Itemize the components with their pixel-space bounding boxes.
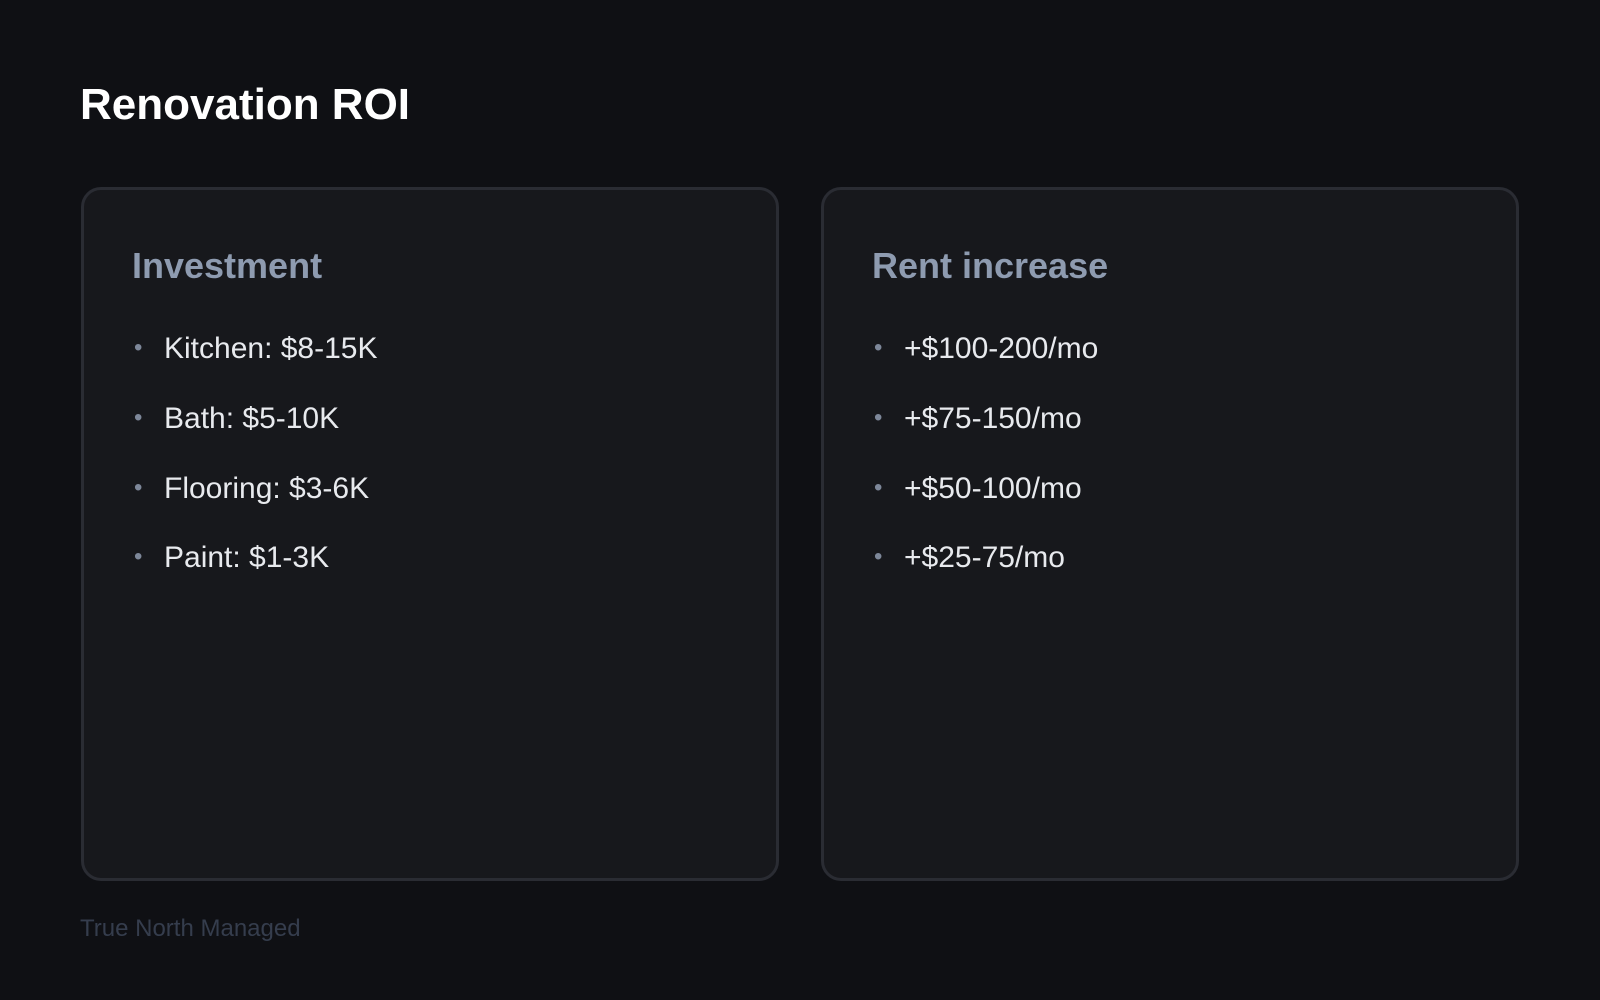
list: rent items: • (874, 404, 882, 431)
list: investment items: Flooring: $3-6K (164, 472, 369, 505)
list: rent items: • (874, 334, 882, 361)
list: investment items: Paint: $1-3K (164, 541, 329, 574)
heading: rent increase: Rent increase (872, 245, 1108, 286)
list: rent items: • (874, 474, 882, 501)
title: Renovation ROI (80, 80, 410, 129)
list: investment items: Kitchen: $8-15K (164, 332, 377, 365)
footer: True North Managed (80, 915, 301, 942)
list: rent items (874, 332, 1098, 574)
list: investment items: • (134, 404, 142, 431)
list: rent items: +$25-75/mo (904, 541, 1065, 574)
list: investment items: • (134, 334, 142, 361)
panel: investment (81, 187, 779, 881)
list: rent items: +$75-150/mo (904, 402, 1082, 435)
list: investment items (134, 332, 378, 574)
list: investment items: Bath: $5-10K (164, 402, 339, 435)
list: rent items: +$50-100/mo (904, 472, 1082, 505)
panel: rent increase (821, 187, 1519, 881)
list: investment items: • (134, 543, 142, 570)
list: investment items: • (134, 474, 142, 501)
heading: investment: Investment (132, 245, 322, 286)
list: rent items: +$100-200/mo (904, 332, 1098, 365)
list: rent items: • (874, 543, 882, 570)
